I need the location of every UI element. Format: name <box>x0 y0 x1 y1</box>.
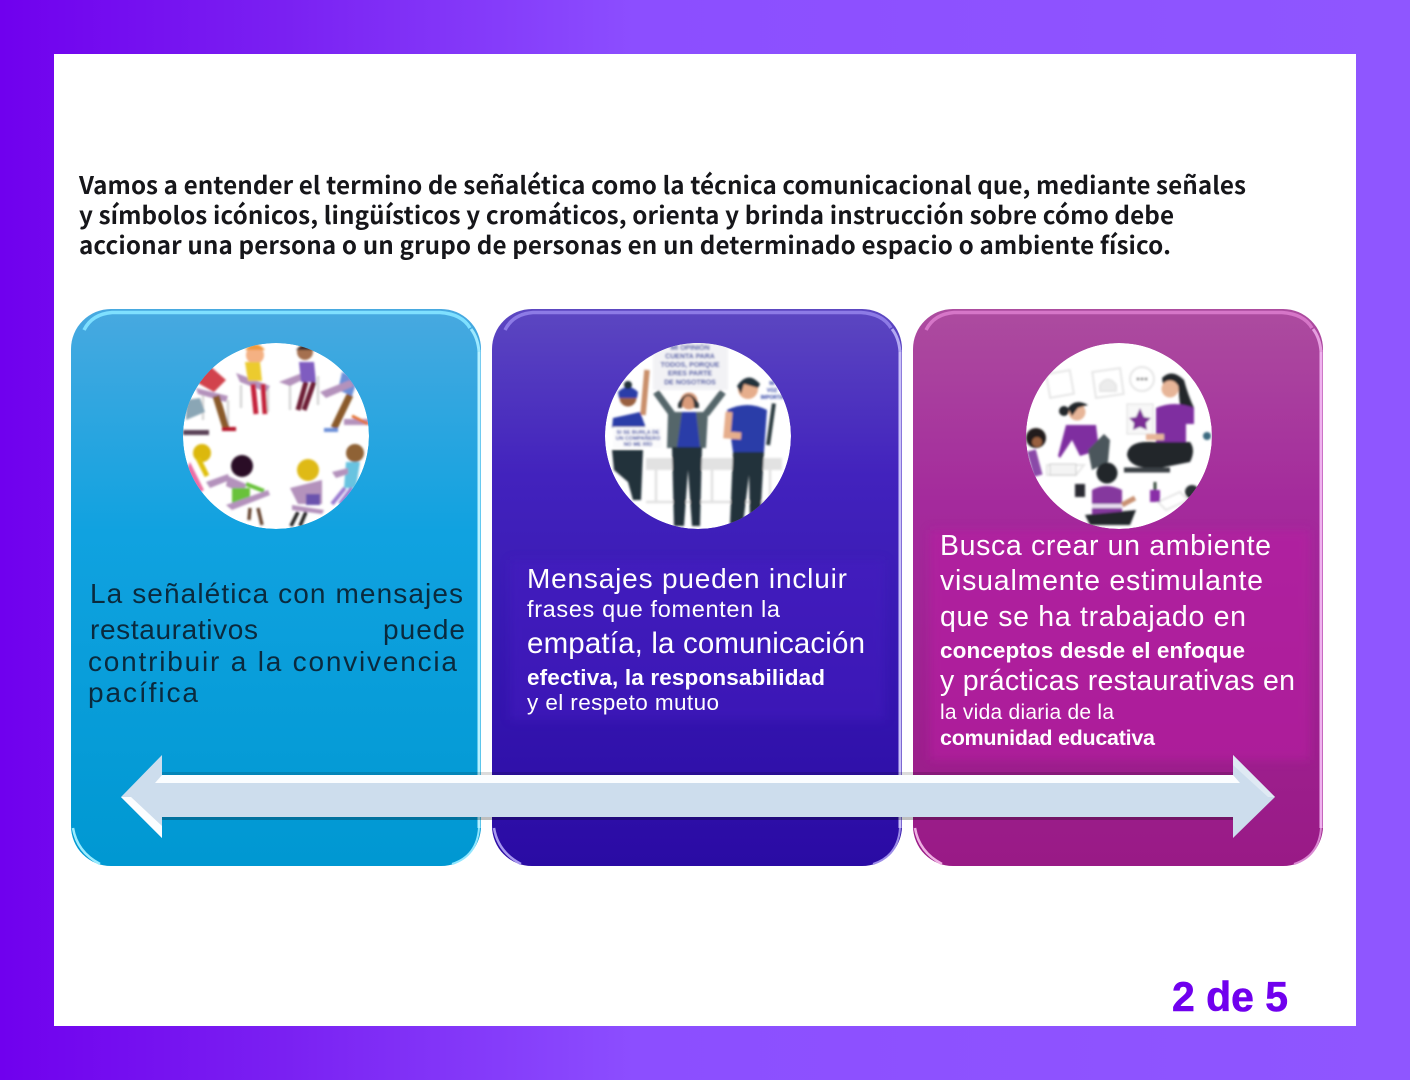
illustration: people holding signs: MI <box>769 381 775 387</box>
text: magenta card description <box>940 530 1295 750</box>
illustration: people holding signs: VOZ <box>767 388 777 394</box>
panel: blue card <box>71 309 481 866</box>
illustration: people holding signs: SI SE BURLA DE <box>617 430 660 436</box>
illustration: students seated in a circle <box>183 343 372 529</box>
illustration: people holding signs <box>605 340 791 529</box>
illustration: teacher and children on the floor <box>1026 343 1212 529</box>
illustration: people holding signs: CUENTA PARA <box>665 354 715 360</box>
text: magenta card description: comunidad educativa <box>940 726 1156 750</box>
illustration: people holding signs: DE NOSOTROS <box>664 380 716 386</box>
text: indigo card description: y el respeto mutuo <box>527 690 719 715</box>
text: indigo card description: frases que fomenten la <box>527 596 781 622</box>
text: magenta card description: que se ha trabajado en <box>940 601 1246 633</box>
text: magenta card description: conceptos desde el enfoque <box>940 638 1245 663</box>
illustration: people holding signs: NO ME RÍO <box>624 440 652 448</box>
text: magenta card description: la vida diaria de la <box>940 701 1114 724</box>
illustration: people holding signs: IMPORTA <box>761 395 784 401</box>
text: blue card description: contribuir a la convivencia <box>88 646 457 677</box>
illustration: people holding signs: ERES PARTE <box>668 370 712 378</box>
illustration: people holding signs: MI OPINIÓN <box>670 343 710 352</box>
panel: indigo card <box>492 309 902 866</box>
text: magenta card description: Busca crear un ambiente <box>940 530 1271 562</box>
intro paragraph <box>78 166 1246 261</box>
text: magenta card description: visualmente estimulante <box>940 565 1263 597</box>
intro paragraph: accionar una persona o un grupo de personas en un determinado espacio o ambiente físico. <box>79 226 1171 261</box>
text: indigo card description: empatía, la comunicación <box>527 627 865 660</box>
intro paragraph: y símbolos icónicos, lingüísticos y cromáticos, orienta y brinda instrucción sobre cómo debe <box>79 196 1174 231</box>
text: blue card description: puede <box>383 614 465 645</box>
illustration: people holding signs: UN COMPAÑERO <box>616 435 660 442</box>
panel: magenta card <box>913 309 1323 866</box>
text: blue card description: restaurativos <box>90 614 258 645</box>
text: magenta card description: y prácticas restaurativas en <box>940 665 1295 697</box>
text: blue card description: La señalética con mensajes <box>90 578 463 609</box>
text: indigo card description: efectiva, la responsabilidad <box>527 665 825 690</box>
page counter: 2 de 5 <box>1172 973 1288 1020</box>
arrow: double-headed horizontal arrow <box>121 755 1275 838</box>
text: blue card description <box>88 578 465 708</box>
intro paragraph: Vamos a entender el termino de señalética como la técnica comunicacional que, mediante señales <box>78 166 1246 201</box>
text: blue card description: pacífica <box>88 677 198 708</box>
illustration: people holding signs: TODOS, PORQUE <box>660 362 720 369</box>
text: indigo card description: Mensajes pueden incluir <box>527 563 847 594</box>
text: indigo card description <box>527 563 865 715</box>
